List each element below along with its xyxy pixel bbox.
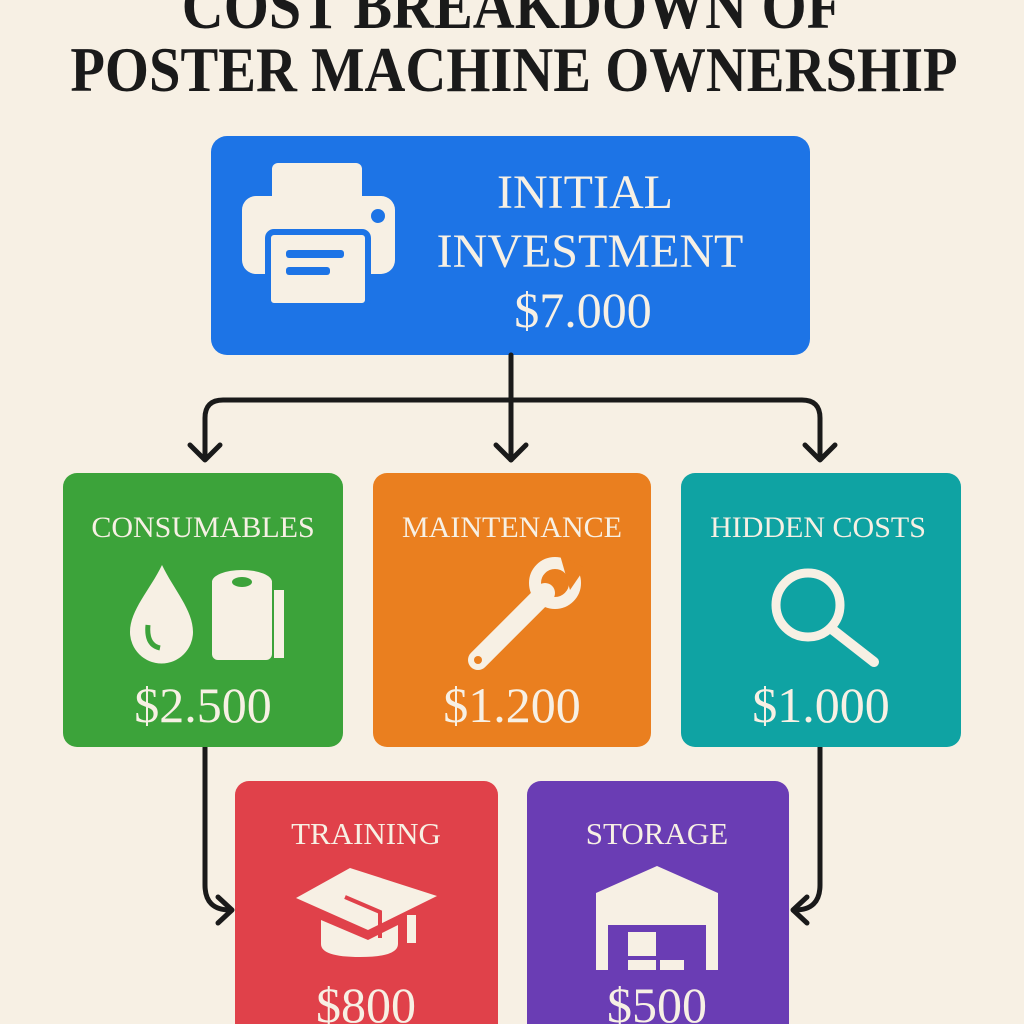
panel: maintenance xyxy=(373,473,651,747)
panel: storage xyxy=(527,781,789,1024)
icon: drop and paper roll xyxy=(130,565,284,664)
panel: consumables xyxy=(63,473,343,747)
title: POSTER MACHINE OWNERSHIP xyxy=(70,35,958,106)
title xyxy=(70,0,958,106)
icon: magnifier xyxy=(776,573,874,662)
panel: training: TRAINING xyxy=(291,816,441,851)
panel: initial investment: INITIAL xyxy=(497,166,673,219)
panel: initial investment xyxy=(211,136,810,355)
panel: maintenance: MAINTENANCE xyxy=(402,511,622,544)
icon: graduation cap xyxy=(296,868,437,957)
panel: hidden costs xyxy=(681,473,961,747)
icon: warehouse xyxy=(596,866,718,970)
icon: printer xyxy=(242,163,395,306)
panel: training xyxy=(235,781,498,1024)
panel: initial investment: $7.000 xyxy=(514,282,652,338)
arrow: connectors from initial investment xyxy=(190,355,835,923)
panel: storage: STORAGE xyxy=(586,816,728,851)
panel: consumables: CONSUMABLES xyxy=(91,511,315,544)
panel: hidden costs: $1.000 xyxy=(752,677,890,733)
icon: wrench xyxy=(478,563,575,660)
panel: consumables: $2.500 xyxy=(134,677,272,733)
panel: hidden costs: HIDDEN COSTS xyxy=(710,511,926,544)
panel: initial investment: INVESTMENT xyxy=(437,225,743,278)
panel: maintenance: $1.200 xyxy=(443,677,581,733)
